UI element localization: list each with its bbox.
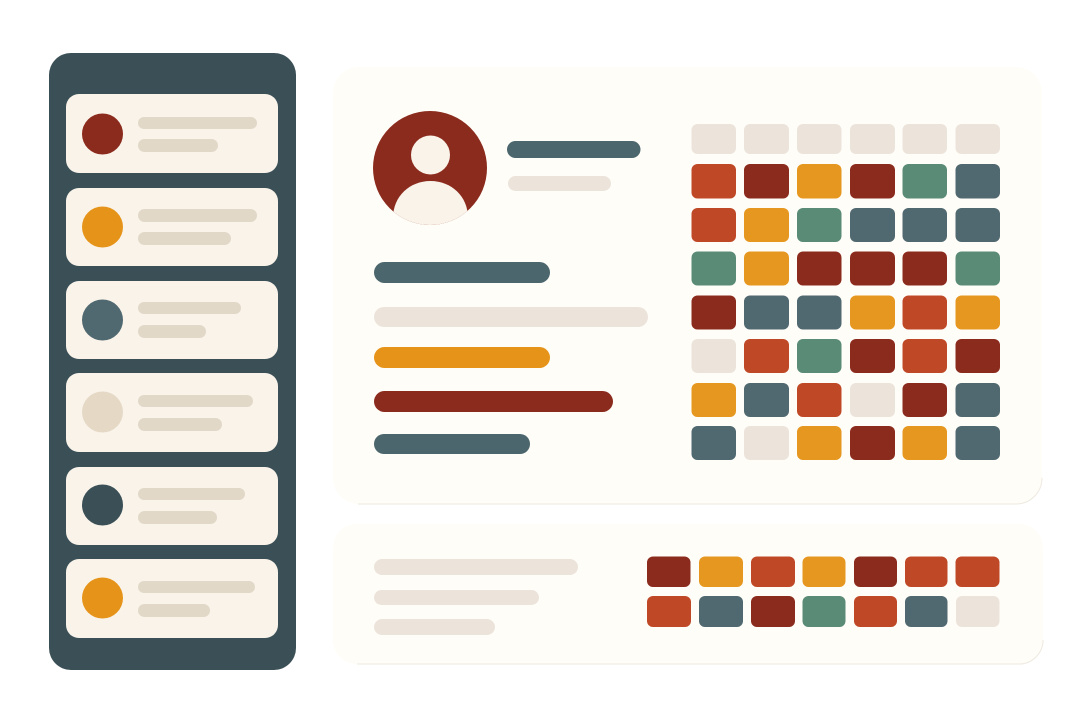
row 2 <box>692 208 1000 242</box>
row 6 <box>692 383 1000 417</box>
panel: sidebar <box>49 53 296 670</box>
panel: main profile <box>358 111 1042 504</box>
list card 1 <box>66 94 278 173</box>
list card 3 <box>66 281 278 359</box>
swatch row 1 <box>647 556 1000 587</box>
profile name bar <box>507 141 640 158</box>
summary bars <box>374 559 578 635</box>
profile subtitle bar <box>508 176 611 191</box>
detail bars <box>374 262 648 454</box>
row 1 <box>692 164 1000 198</box>
list card 2 <box>66 188 278 266</box>
list card 4 <box>66 373 278 452</box>
header row <box>692 124 1000 154</box>
row 3 <box>692 252 1000 286</box>
row 4 <box>692 296 1000 330</box>
panel: bottom summary <box>333 524 1043 664</box>
swatch row 2 <box>647 596 1000 627</box>
list card 6 <box>66 559 278 638</box>
icon: avatar <box>373 111 487 226</box>
row 7 <box>692 426 1000 460</box>
calendar grid <box>692 124 1000 460</box>
list card 5 <box>66 467 278 545</box>
row 5 <box>692 339 1000 373</box>
